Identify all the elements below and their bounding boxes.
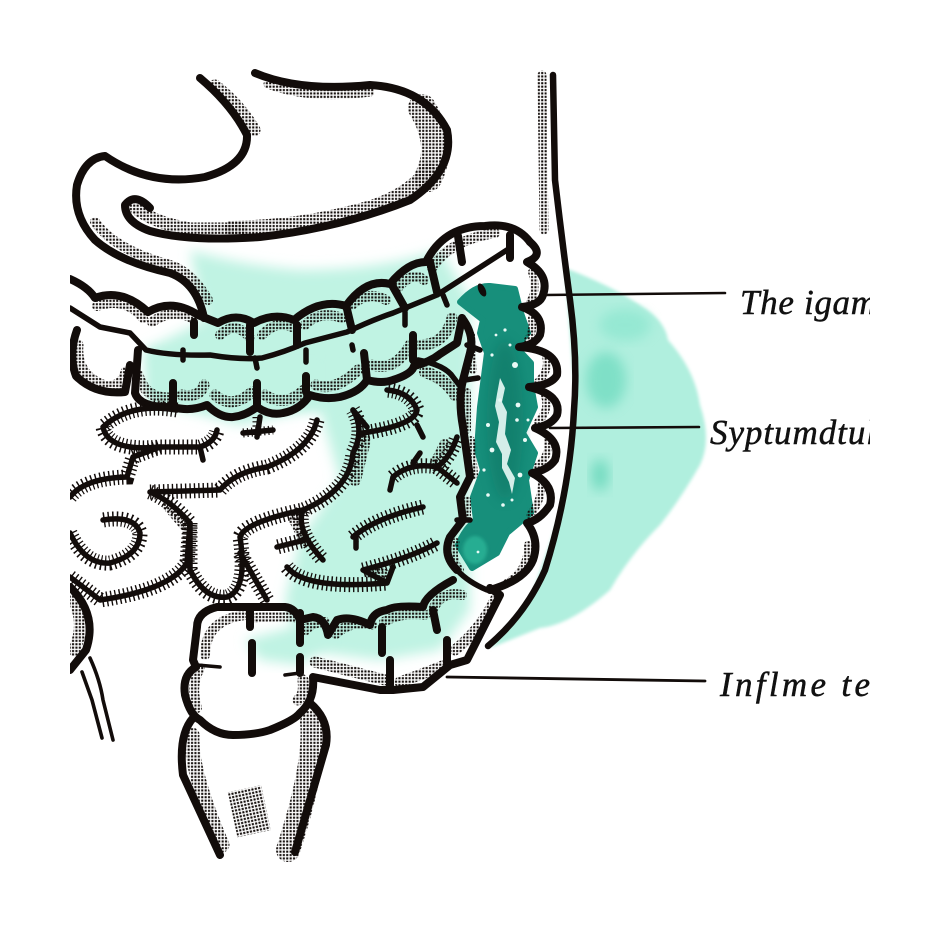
watercolor wash: right of abdominal wall: [490, 268, 706, 648]
left-edge vessel and loop: [70, 587, 113, 740]
descending colon with inflamed lumen: [447, 242, 558, 590]
label: Syptumdtul: Syptumdtul: [710, 413, 876, 452]
label: The igam: The igam: [740, 283, 876, 322]
small intestine: [70, 360, 463, 600]
stomach: [76, 73, 448, 318]
transverse colon: [70, 225, 530, 417]
abdominal wall line: [488, 75, 575, 646]
illustration: [70, 69, 870, 862]
rectum: [182, 703, 327, 855]
sigmoid colon and rectal loop: [184, 580, 500, 735]
leader line: bottom label: [447, 677, 705, 681]
label: Inflme te: Inflme te: [719, 665, 870, 704]
lesion speckles: [477, 328, 530, 553]
leader line: middle label: [550, 427, 699, 428]
watercolor wash: behind colon and small intestine: [145, 250, 470, 665]
leader line: top label: [545, 293, 725, 295]
